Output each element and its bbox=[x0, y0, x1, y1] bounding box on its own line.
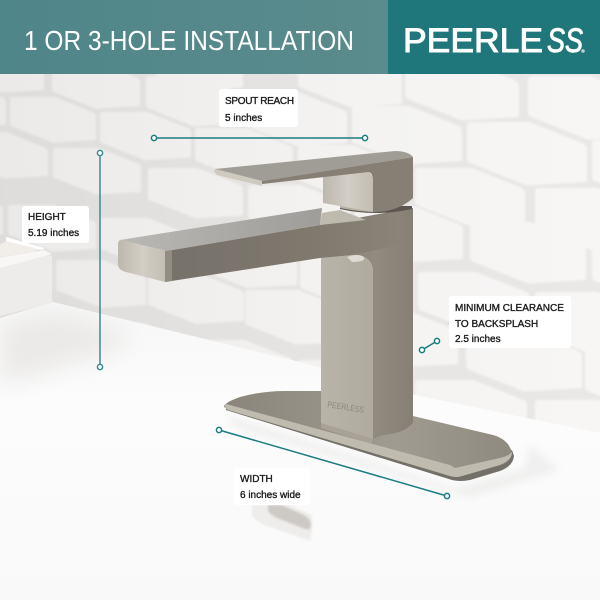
body column bbox=[321, 255, 373, 439]
spout reflection bbox=[320, 210, 366, 225]
faucet bbox=[118, 151, 514, 481]
handle block bbox=[323, 172, 373, 212]
label: height bbox=[22, 206, 89, 243]
plate shadow bbox=[225, 414, 560, 498]
soap dish bbox=[0, 237, 52, 316]
label: height: HEIGHT bbox=[28, 212, 66, 223]
deck plate bbox=[224, 391, 514, 481]
header band: brand panel bbox=[388, 0, 600, 74]
header band: left translucent teal bbox=[0, 0, 388, 74]
label: minimum clearance: TO BACKSPLASH bbox=[455, 318, 538, 330]
handle lever bbox=[262, 157, 413, 212]
label: spout reach bbox=[219, 89, 298, 127]
wall shading darker at left bbox=[0, 74, 600, 440]
label: spout reach: SPOUT REACH bbox=[225, 96, 294, 107]
label: width: WIDTH bbox=[240, 474, 273, 485]
label: height: 5.19 inches bbox=[28, 228, 79, 239]
spout highlight bbox=[347, 255, 364, 262]
label: minimum clearance: 2.5 inches bbox=[455, 334, 501, 345]
height line bbox=[97, 150, 103, 370]
label: minimum clearance bbox=[449, 296, 571, 348]
brand logo: SS bbox=[547, 22, 583, 60]
label: width bbox=[234, 468, 310, 505]
title: 1 OR 3-HOLE INSTALLATION bbox=[24, 25, 354, 56]
ring under handle bbox=[340, 205, 412, 213]
spout side bbox=[165, 210, 400, 282]
label: width: 6 inches wide bbox=[240, 490, 301, 501]
width line bbox=[216, 427, 450, 499]
sink basin bbox=[0, 302, 600, 600]
counter reflection bbox=[0, 312, 135, 385]
wall tiles bbox=[0, 40, 600, 464]
sink drain slot bbox=[252, 505, 312, 541]
spout tip bbox=[118, 240, 167, 282]
wall bbox=[0, 0, 600, 440]
label: minimum clearance: MINIMUM CLEARANCE bbox=[455, 303, 564, 314]
label: spout reach: 5 inches bbox=[225, 113, 262, 124]
clearance line bbox=[419, 338, 440, 353]
spout reach line bbox=[151, 135, 368, 141]
spout top bbox=[120, 208, 322, 251]
logo on body: PEERLESS bbox=[327, 399, 365, 415]
brand logo: PEERLE bbox=[403, 22, 543, 60]
